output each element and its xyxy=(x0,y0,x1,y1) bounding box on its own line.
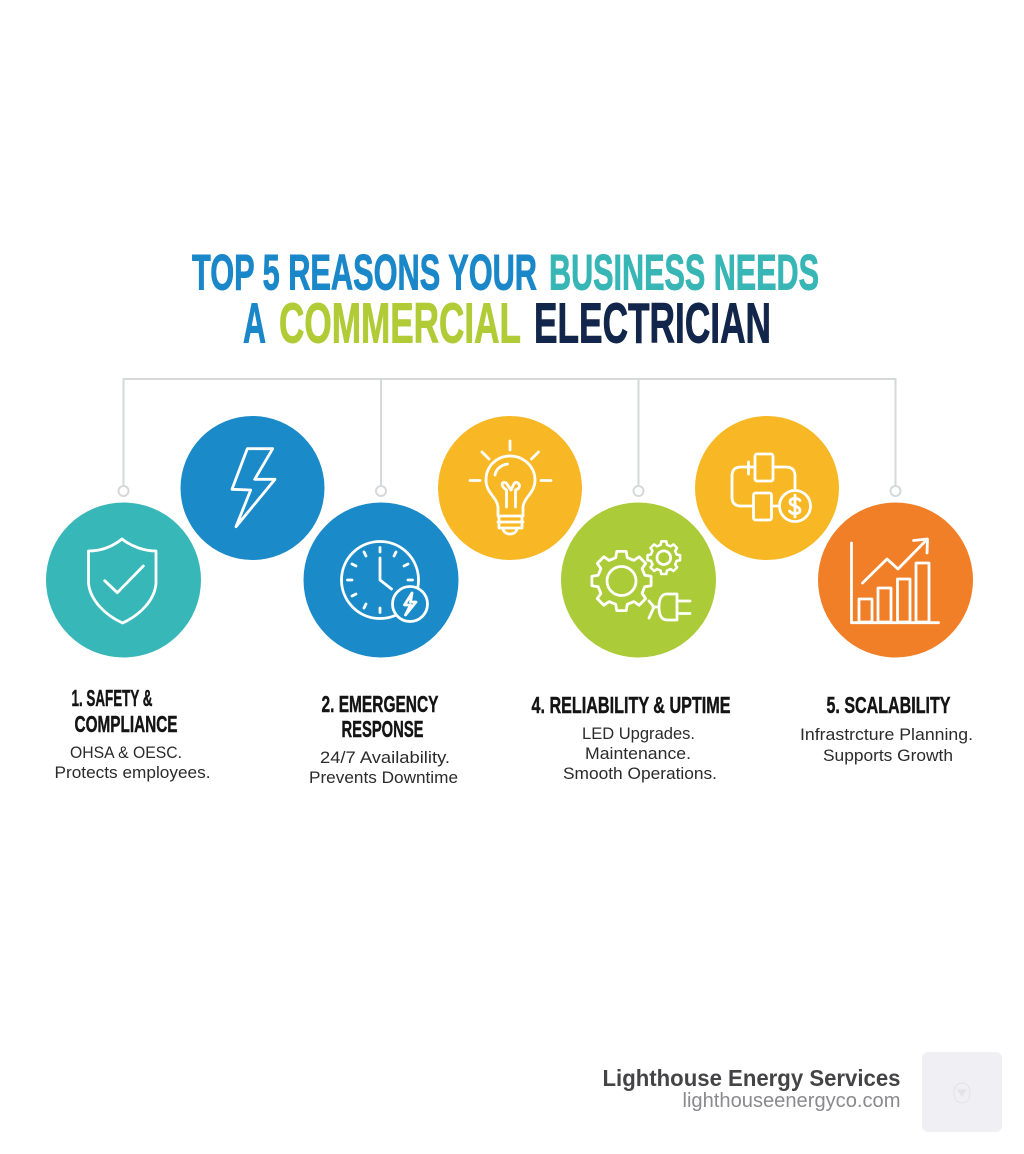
item 4: reliability and uptime: Maintenance. xyxy=(585,744,691,763)
title: ELECTRICIAN xyxy=(534,292,771,356)
title: A xyxy=(243,292,266,356)
item 2: emergency response: 2. EMERGENCY xyxy=(322,691,439,717)
circle: lightning bolt xyxy=(180,416,324,560)
circle: safety shield xyxy=(46,502,201,658)
footer brand text: Lighthouse Energy Services xyxy=(602,1065,900,1091)
item 2: emergency response: RESPONSE xyxy=(342,716,424,742)
item 2: emergency response: 24/7 Availability. xyxy=(320,748,450,767)
item 1: safety and compliance xyxy=(54,685,210,782)
item 1: safety and compliance: Protects employees. xyxy=(54,763,210,782)
item 4: reliability and uptime: LED Upgrades. xyxy=(582,724,695,743)
title: TOP 5 REASONS YOUR xyxy=(192,244,537,300)
circle: circuit and cost xyxy=(695,416,839,560)
item 5: scalability: Supports Growth xyxy=(823,746,953,765)
icon: shield with check xyxy=(88,539,156,623)
icon: clock with bolt xyxy=(342,542,428,622)
item 4: reliability and uptime: 4. RELIABILITY & UPTIME xyxy=(532,692,730,718)
circle: light bulb xyxy=(438,416,582,560)
icon: circuit with dollar xyxy=(732,454,810,522)
item 2: emergency response: Prevents Downtime xyxy=(309,768,458,787)
item 1: safety and compliance: COMPLIANCE xyxy=(74,711,178,737)
item 5: scalability xyxy=(800,692,973,765)
circle: scalability chart xyxy=(818,502,973,658)
item 5: scalability: Infrastrcture Planning. xyxy=(800,725,973,744)
item 4: reliability and uptime: Smooth Operations. xyxy=(563,764,717,783)
connector lines xyxy=(118,379,900,496)
title: COMMERCIAL xyxy=(279,292,521,356)
icon: light bulb xyxy=(470,441,551,534)
item 2: emergency response xyxy=(309,691,458,787)
icon: faint bear logo xyxy=(954,1083,970,1103)
circle: emergency clock xyxy=(304,502,458,658)
item 5: scalability: 5. SCALABILITY xyxy=(826,692,951,718)
title: BUSINESS NEEDS xyxy=(549,244,819,300)
item 1: safety and compliance: 1. SAFETY & xyxy=(72,685,153,711)
footer brand text xyxy=(602,1065,900,1112)
item 1: safety and compliance: OHSA & OESC. xyxy=(70,743,182,762)
icon: gears and plug xyxy=(592,541,690,620)
footer brand text: lighthouseenergyco.com xyxy=(682,1089,900,1112)
title xyxy=(192,244,819,356)
icon: growth chart xyxy=(852,539,938,623)
footer logo placeholder xyxy=(922,1052,1002,1132)
circle: reliability gears xyxy=(561,502,716,658)
item 4: reliability and uptime xyxy=(532,692,730,783)
icon: lightning bolt xyxy=(232,449,275,527)
